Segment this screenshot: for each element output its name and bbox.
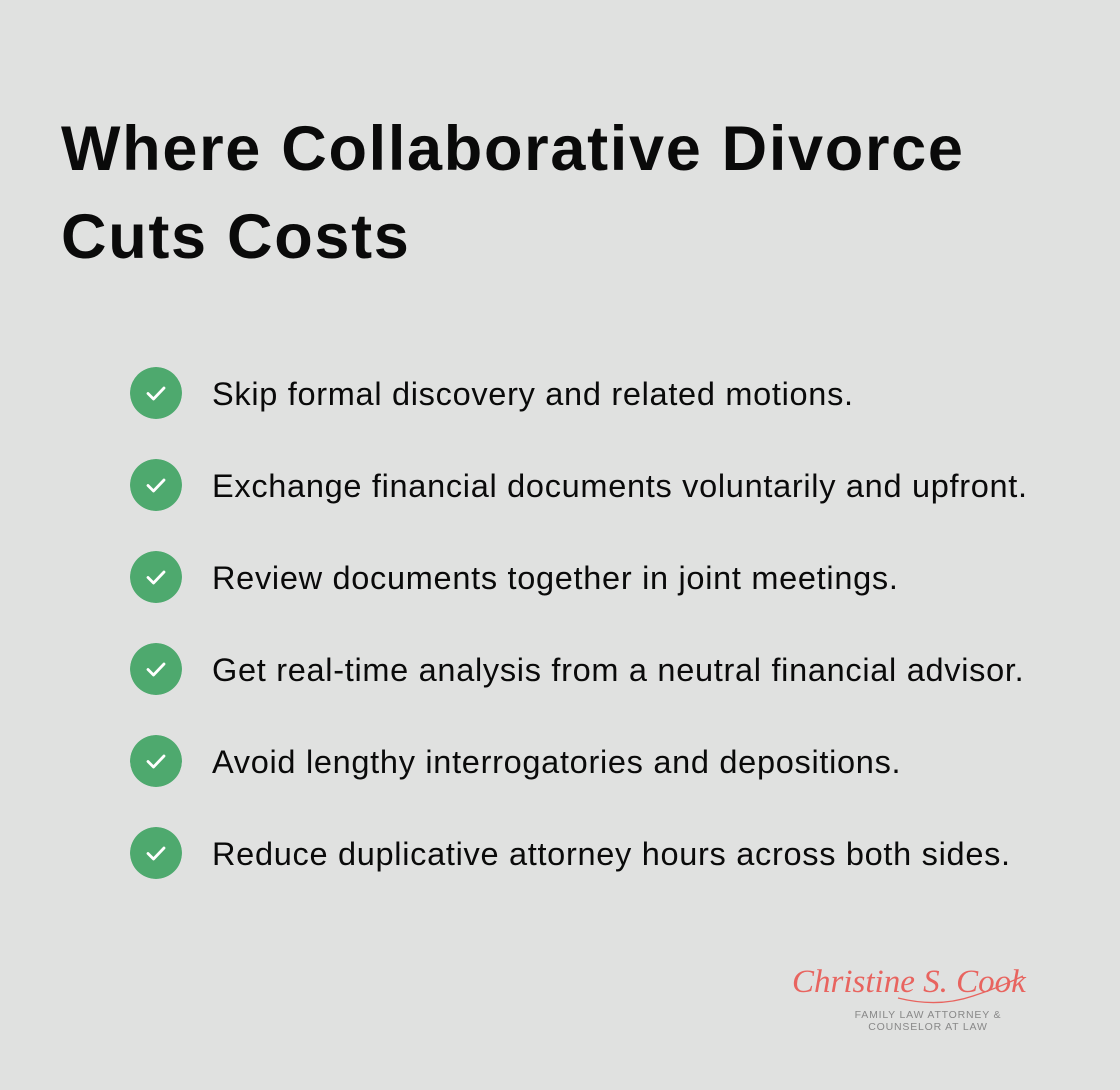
item 5: Avoid lengthy interrogatories and depositions. (212, 744, 901, 780)
checklist (130, 367, 1028, 879)
title: Where Collaborative Divorce (61, 114, 965, 184)
item 6: Reduce duplicative attorney hours across both sides. (212, 836, 1011, 872)
title: Cuts Costs (61, 202, 411, 272)
logo: Christine S. Cook (792, 964, 1027, 1000)
logo: FAMILY LAW ATTORNEY & (855, 1009, 1001, 1021)
item 1: Skip formal discovery and related motions. (212, 376, 854, 412)
item 6 (130, 827, 1011, 879)
item 3 (130, 551, 899, 603)
item 1 (130, 367, 854, 419)
title (61, 114, 965, 272)
logo: COUNSELOR AT LAW (868, 1021, 988, 1033)
item 2: Exchange financial documents voluntarily and upfront. (212, 468, 1028, 504)
item 2 (130, 459, 1028, 511)
item 5 (130, 735, 901, 787)
item 3: Review documents together in joint meetings. (212, 560, 899, 596)
item 4: Get real-time analysis from a neutral financial advisor. (212, 652, 1024, 688)
item 4 (130, 643, 1024, 695)
logo (792, 964, 1027, 1033)
